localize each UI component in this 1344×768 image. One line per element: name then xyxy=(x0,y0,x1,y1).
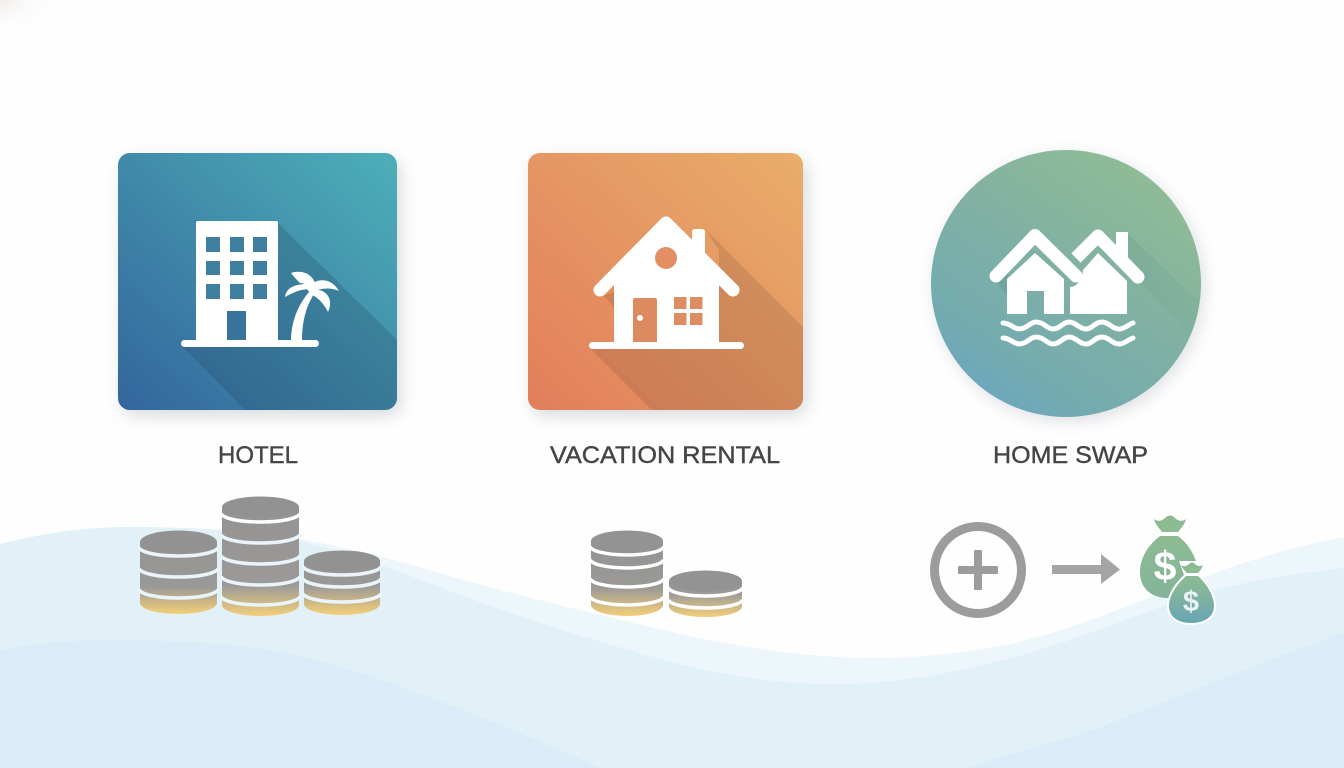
long icon shadow xyxy=(589,229,803,410)
dollar sign: $ xyxy=(1154,543,1177,589)
coin stack: right xyxy=(303,550,381,615)
circle shadow xyxy=(934,154,1204,422)
card shadow xyxy=(122,159,401,416)
icon: hotel building with palm tree xyxy=(181,221,339,347)
card shadow xyxy=(532,159,807,416)
panel: home swap xyxy=(931,150,1204,422)
icon: two houses over water xyxy=(996,232,1144,344)
label: hotel: HOTEL xyxy=(218,442,298,469)
icon: house xyxy=(589,223,744,349)
hotel card background xyxy=(118,153,397,410)
background corner tint xyxy=(0,0,60,36)
panel: vacation rental xyxy=(528,153,807,416)
background waves xyxy=(0,527,1344,768)
icon: rental coin stacks xyxy=(590,530,743,617)
icon: money bags xyxy=(1140,516,1216,625)
label: home swap: HOME SWAP xyxy=(993,442,1148,469)
coin stack: right xyxy=(668,570,743,617)
icon: plus in circle xyxy=(934,526,1022,614)
coin stack: left xyxy=(590,530,664,616)
coin stack: middle xyxy=(221,496,300,616)
long icon shadow xyxy=(997,234,1138,294)
circle background xyxy=(931,150,1201,417)
icon: hotel coin stacks xyxy=(139,496,381,616)
rental card background xyxy=(528,153,803,410)
panel: hotel xyxy=(118,153,401,416)
long icon shadow xyxy=(182,223,397,410)
label: vacation rental: VACATION RENTAL xyxy=(550,442,780,469)
coin stack: left xyxy=(139,530,218,614)
dollar sign: $ xyxy=(1183,586,1199,618)
arrow xyxy=(1052,554,1120,584)
